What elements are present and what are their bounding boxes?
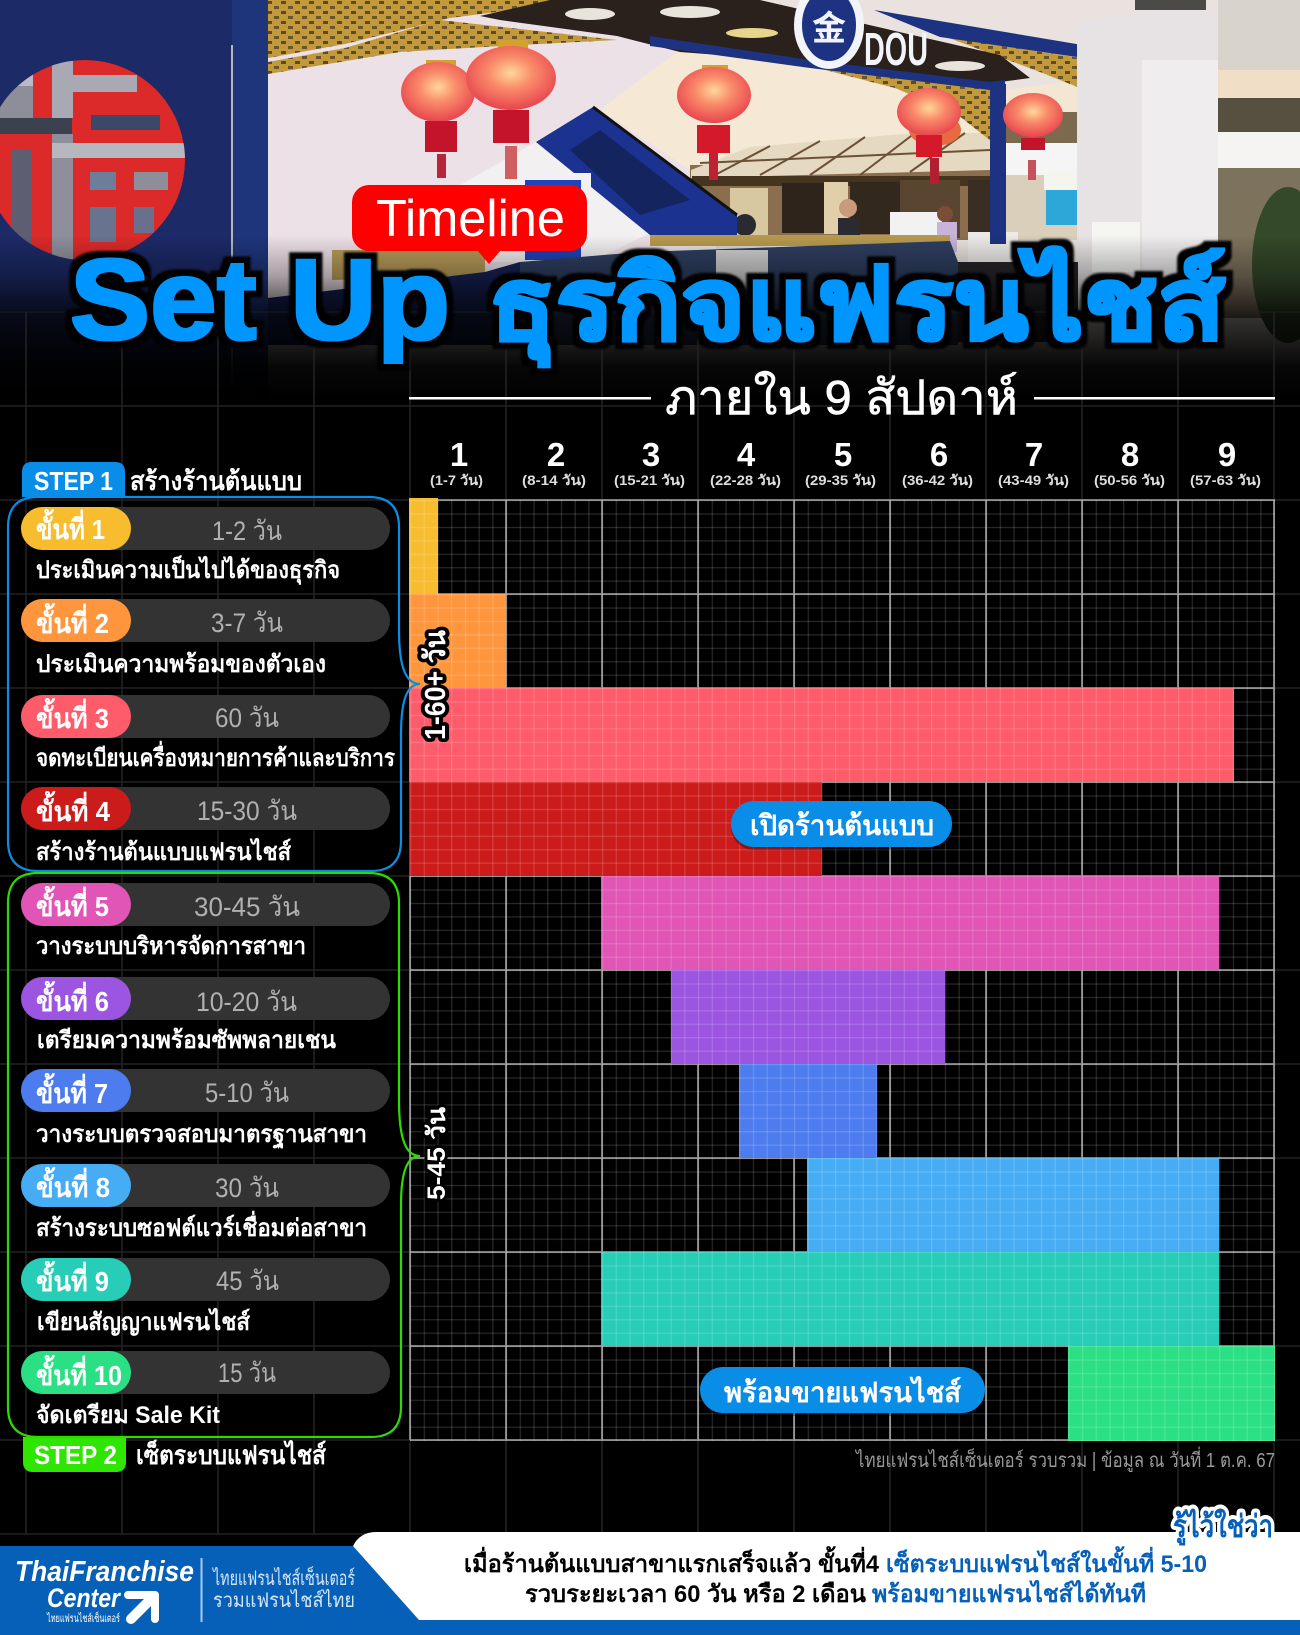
week header: 2 [547, 436, 565, 473]
step 1 tab: STEP 1 [34, 466, 113, 496]
left wall [0, 0, 268, 400]
week header: 8 [1121, 436, 1139, 473]
step row 2 [21, 599, 390, 678]
footer panel [0, 1508, 1300, 1635]
subtitle: within 9 weeks: ภายใน 9 สัปดาห์ [665, 370, 1018, 425]
timeline speech bubble: Timeline [376, 190, 565, 248]
food court roof [690, 133, 992, 240]
step 2 tab [23, 1437, 326, 1472]
title [70, 237, 1225, 367]
people in photo [716, 199, 957, 294]
gantt chart [409, 498, 1275, 1441]
step row 4 [21, 787, 390, 866]
footer message line 1: เซ็ตระบบแฟรนไชส์ในขั้นที่ 5-10 [886, 1545, 1207, 1578]
logo on sign: 金 [812, 10, 846, 48]
logo on sign [798, 0, 928, 75]
footer message line 2: รวบระยะเวลา 60 วัน หรือ 2 เดือน [525, 1581, 867, 1608]
bar: step 6 [671, 970, 945, 1064]
footer logo: ไทยแฟรนไชส์เซ็นเตอร์ [46, 1611, 120, 1625]
title: Set Up [70, 237, 450, 364]
step row 9: ขั้นที่ 9 [36, 1260, 109, 1297]
step row 3: จดทะเบียนเครื่องหมายการค้าและบริการ [36, 740, 395, 772]
bar: step 9 [601, 1252, 1219, 1346]
step row 7: 5-10 วัน [205, 1078, 289, 1108]
escalator [460, 107, 737, 263]
week header [430, 436, 1261, 488]
step row 9 [21, 1258, 390, 1336]
bracket: step 1 group [8, 497, 420, 871]
step row 4: สร้างร้านต้นแบบแฟรนไชส์ [36, 837, 291, 866]
step 1 tab [22, 462, 302, 497]
footer logo: ไทยแฟรนไชส์เซ็นเตอร์ [212, 1565, 355, 1590]
icon: logo arrow [128, 1595, 155, 1619]
week header: (29-35 วัน) [805, 472, 876, 488]
title: ธุรกิจแฟรนไชส์ [489, 247, 1225, 367]
white pillar [1077, 8, 1218, 320]
logo on sign: DOU [864, 23, 928, 75]
week header: 5 [834, 436, 852, 473]
bar: step 8 [807, 1158, 1219, 1252]
footer message line 2 [525, 1579, 1146, 1608]
callout: ready to sell franchise [700, 1367, 985, 1416]
red paper lanterns [401, 40, 1063, 184]
week header: (50-56 วัน) [1094, 472, 1165, 488]
step row 5: วางระบบบริหารจัดการสาขา [36, 933, 306, 960]
step 2 tab: STEP 2 [34, 1440, 117, 1470]
week header: (22-28 วัน) [710, 472, 781, 488]
step row 3 [21, 695, 395, 772]
week header: 9 [1218, 436, 1236, 473]
step row 10: ขั้นที่ 10 [36, 1354, 122, 1391]
step row 5: ขั้นที่ 5 [36, 885, 109, 922]
step row 1: 1-2 วัน [212, 516, 282, 546]
callout: open prototype store [731, 801, 952, 850]
step row 6: ขั้นที่ 6 [36, 980, 109, 1017]
step row 7: ขั้นที่ 7 [36, 1072, 108, 1109]
footer message line 1: เมื่อร้านต้นแบบสาขาแรกเสร็จแล้ว ขั้นที่4 [464, 1545, 880, 1578]
blue frame [650, 10, 1142, 276]
step row 4: ขั้นที่ 4 [36, 790, 110, 827]
step row 7: วางระบบตรวจสอบมาตรฐานสาขา [36, 1121, 367, 1150]
round emblem [0, 60, 185, 260]
week header: (43-49 วัน) [998, 472, 1069, 488]
bar: step 5 [601, 876, 1219, 970]
step row 2: ประเมินความพร้อมของตัวเอง [36, 651, 326, 678]
bar: step 10 [1068, 1346, 1275, 1441]
right side ceiling and shops [1135, 0, 1300, 343]
background grid lines [0, 312, 1300, 1534]
week header: (15-21 วัน) [614, 472, 685, 488]
step row 9: 45 วัน [216, 1266, 279, 1296]
step row 4: 15-30 วัน [197, 796, 297, 826]
week header: (8-14 วัน) [522, 472, 586, 488]
bar: step 7 [739, 1064, 877, 1158]
step row 8: 30 วัน [215, 1173, 279, 1203]
footer message line 2: พร้อมขายแฟรนไชส์ได้ทันที [872, 1579, 1146, 1608]
step row 3: ขั้นที่ 3 [36, 697, 109, 734]
step row 1: ประเมินความเป็นไปได้ของธุรกิจ [36, 555, 340, 586]
ceiling lights and cutouts [565, 6, 985, 71]
lower fade to black [0, 235, 1300, 400]
step row 6 [21, 977, 390, 1054]
bracket: step 2 group [8, 873, 420, 1437]
bar: step 3 [409, 688, 1234, 782]
step row 8 [21, 1164, 390, 1242]
bar: step 1 [409, 498, 438, 594]
dark ceiling [480, 0, 1030, 84]
step row 10 [21, 1351, 390, 1429]
week header: (36-42 วัน) [902, 472, 973, 488]
step 2 tab: เซ็ตระบบแฟรนไชส์ [136, 1439, 326, 1470]
step row 2: ขั้นที่ 2 [36, 602, 109, 639]
footer logo [15, 1556, 355, 1625]
step row 8: สร้างระบบซอฟต์แวร์เชื่อมต่อสาขา [36, 1210, 367, 1242]
photo: franchise shop front [0, 0, 1300, 400]
duration label: 5-45 days: 5-45 วัน [423, 1107, 451, 1200]
week header: 3 [642, 436, 660, 473]
step row 8: ขั้นที่ 8 [36, 1166, 110, 1203]
bar: step 2 [409, 594, 506, 688]
callout: ready to sell franchise: พร้อมขายแฟรนไชส์ [724, 1376, 962, 1408]
step row 6: เตรียมความพร้อมซัพพลายเชน [37, 1027, 337, 1054]
step row 5 [21, 883, 390, 960]
step row 5: 30-45 วัน [194, 892, 300, 922]
step 1 tab: สร้างร้านต้นแบบ [130, 466, 302, 496]
duration label: 1-60+ days: 1-60+ วัน [420, 630, 452, 740]
footer logo: ThaiFranchise [15, 1556, 194, 1588]
step row 7 [21, 1069, 390, 1150]
week header: 7 [1025, 436, 1043, 473]
step row 3: 60 วัน [215, 703, 279, 733]
timeline speech bubble [352, 185, 587, 264]
step row 10: 15 วัน [218, 1358, 276, 1388]
footer message line 1 [464, 1545, 1207, 1578]
week header: 1 [450, 436, 468, 473]
week header: (57-63 วัน) [1190, 472, 1261, 488]
minor grid overlay [410, 500, 1275, 1441]
step row 2: 3-7 วัน [211, 608, 283, 638]
step row 1: ขั้นที่ 1 [36, 508, 105, 545]
step row 9: เขียนสัญญาแฟรนไชส์ [37, 1307, 250, 1336]
step row 1 [21, 507, 390, 586]
step row 10: จัดเตรียม Sale Kit [36, 1402, 220, 1429]
gold lattice panels [268, 0, 1135, 142]
week header: 4 [737, 436, 756, 473]
week header: (1-7 วัน) [430, 472, 483, 488]
week header: 6 [930, 436, 948, 473]
callout: open prototype store: เปิดร้านต้นแบบ [750, 810, 934, 841]
bar: step 4 [409, 782, 822, 876]
step row 6: 10-20 วัน [196, 987, 297, 1017]
service counter [268, 235, 1078, 345]
badge: did you know: รู้ไว้ใช่ว่า [1173, 1508, 1273, 1546]
footer logo: รวมแฟรนไชส์ไทย [213, 1589, 355, 1612]
footer logo: Center [47, 1583, 121, 1613]
